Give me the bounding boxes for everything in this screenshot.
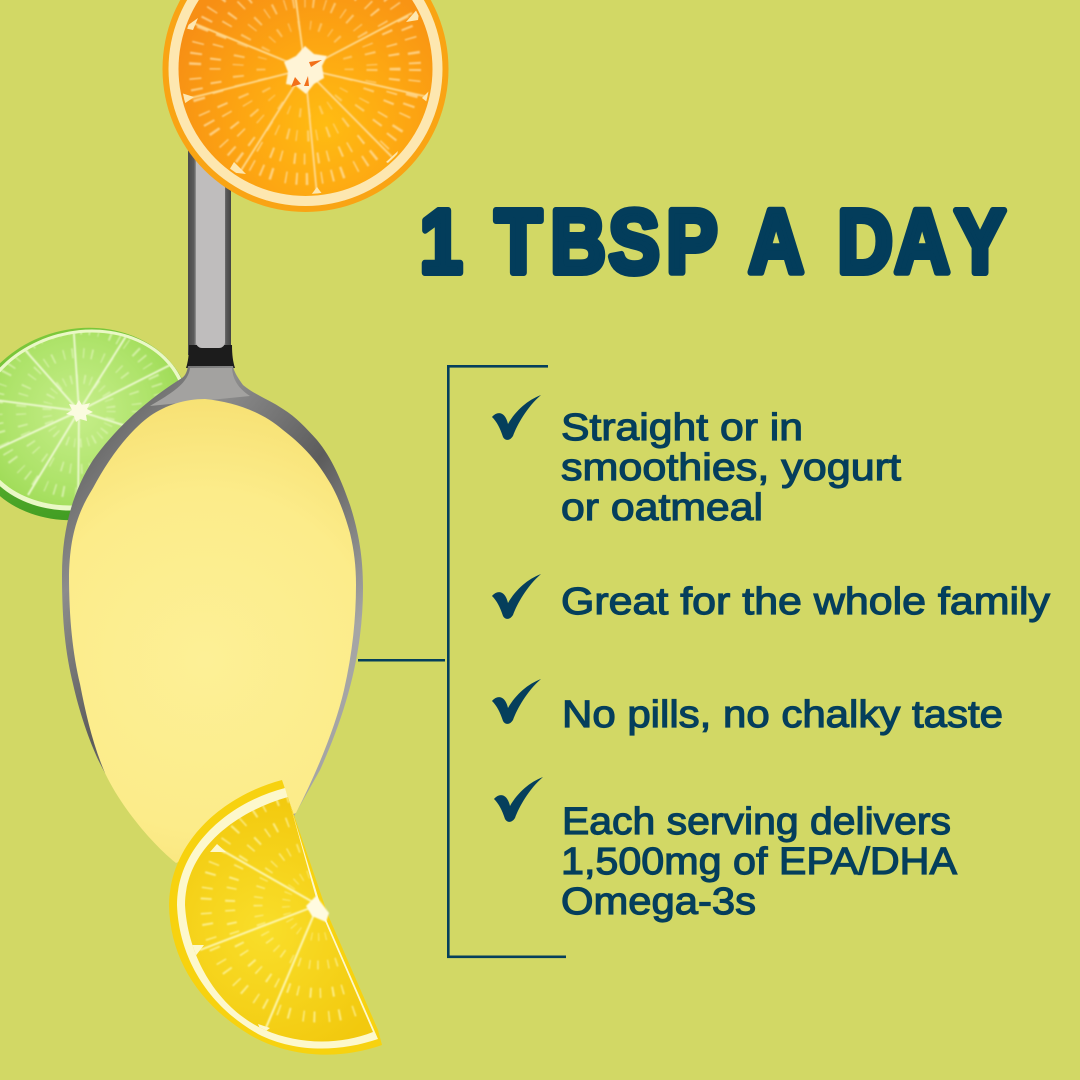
icon: check mark: [492, 679, 541, 724]
text: straight or in smoothies, yogurt or oatmeal: [561, 407, 901, 529]
text: straight or in smoothies, yogurt or oatmeal: Straight or in: [561, 407, 803, 449]
text: straight or in smoothies, yogurt or oatmeal: smoothies, yogurt: [561, 447, 901, 489]
bracket connecting spoon to benefits list: [358, 365, 566, 958]
text: each serving delivers 1,500mg of EPA/DHA Omega-3s: 1,500mg of EPA/DHA: [561, 841, 958, 883]
icon: lime slice: [0, 328, 182, 520]
text: no pills, no chalky taste: No pills, no chalky taste: [562, 694, 1003, 736]
icon: check mark: [492, 395, 541, 440]
benefit: each serving: [494, 777, 958, 923]
orange core: [284, 46, 327, 94]
lemon core: [306, 896, 329, 922]
spoon handle: [188, 150, 231, 355]
spoon: [62, 150, 363, 863]
text: great for the whole family: Great for the whole family: [561, 581, 1050, 623]
icon: lemon wedge: [169, 780, 382, 1055]
text: each serving delivers 1,500mg of EPA/DHA Omega-3s: Each serving delivers: [562, 801, 951, 843]
icon: check mark: [494, 777, 543, 822]
icon: orange slice: [162, 0, 448, 212]
spoon bowl rim: [62, 366, 363, 818]
benefit: straight or in smoothies: [492, 395, 901, 529]
spoon neck: [186, 345, 235, 368]
benefit: no pills: [492, 679, 1003, 736]
benefit: whole family: [492, 574, 1050, 623]
icon: check mark: [492, 574, 541, 619]
title: 1 TBSP A DAY: [420, 191, 1005, 292]
text: each serving delivers 1,500mg of EPA/DHA Omega-3s: Omega-3s: [561, 881, 756, 923]
spoon contents: creamy oil: [69, 399, 356, 863]
text: each serving delivers 1,500mg of EPA/DHA Omega-3s: [561, 801, 958, 923]
text: straight or in smoothies, yogurt or oatmeal: or oatmeal: [561, 487, 763, 529]
